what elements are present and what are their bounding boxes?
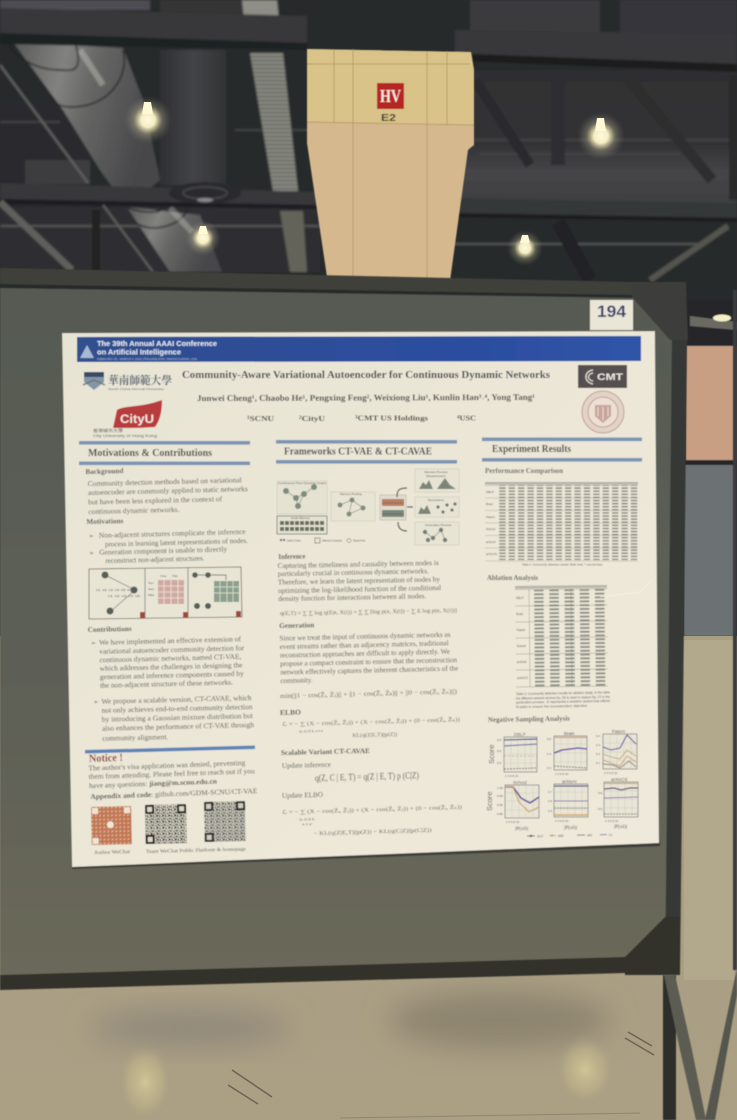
chart: arXivAI: 2 4 6 8 10	[555, 819, 569, 823]
node representation matrix	[380, 495, 406, 520]
y axis labels: Score	[485, 791, 494, 811]
table 2 caption: N-pairs to ensure the reconstruction objective.	[516, 704, 588, 709]
performance comparison heading: Performance Comparison	[485, 467, 563, 475]
chart: arXivCS: arXivCS	[611, 777, 628, 782]
chart: School: 0.95	[497, 794, 503, 798]
x axis labels: |P(ol)|	[564, 824, 577, 831]
scalable variant heading: Scalable Variant CT-CAVAE	[281, 747, 370, 757]
update ELBO formula: (e, e') ∈ E,	[299, 817, 315, 821]
ablation analysis table: arXivAI	[517, 660, 527, 664]
affiliations: ¹SCNU	[247, 414, 275, 423]
output box: attention decoder	[415, 469, 459, 492]
chart: School: School	[513, 780, 527, 785]
QR code: team WeChat platform	[145, 804, 187, 844]
notice text	[88, 759, 258, 801]
table 2 caption: Table 2: Community detection results for ablation study. In the table	[516, 690, 610, 696]
CityU logo	[93, 400, 162, 438]
ceiling lights	[124, 96, 625, 266]
steel diagonals	[0, 65, 733, 280]
chart: School: 0.90	[497, 803, 503, 807]
authors: Junwei Cheng¹, Chaobo He¹, Pengxing Feng², Weixiong Liu¹, Kunlin Han³˒⁴, Yong Tang¹	[197, 392, 535, 403]
performance comparison table: School	[486, 527, 496, 531]
background section: Community detection methods based on variational	[88, 476, 242, 488]
constraint formula: min(||1 − cos(Z̄ᵢ, Z̄ⱼ)|| + ||1 − cos(Z̄ᵢ, Z̄ₖ)|| + ||0 − cos(Z̄ᵢ, Z̄ₙ)||)	[280, 688, 457, 700]
ablation analysis table: School	[517, 644, 526, 648]
contributions section: the non-adjacent structure of these networks.	[100, 678, 233, 690]
booth number 194	[590, 300, 633, 330]
chart: arXivCS: 0.6	[598, 791, 603, 795]
diagram legend: Shared Field	[353, 538, 365, 542]
contributions section: also enhances the performance of CT-VAE through	[102, 721, 255, 733]
chart: Patent: 0.2	[596, 752, 601, 756]
ELBO formula: (e, e') ∈ E, e ≠ e'	[299, 729, 324, 734]
chart: DBLP: DBLP	[514, 732, 526, 737]
affiliations	[247, 414, 476, 423]
CMT logo: CMT	[597, 372, 624, 382]
motivations section: Non-adjacent structures complicate the inference	[99, 528, 246, 540]
update ELBO formula	[282, 804, 463, 838]
ablation analysis table: DBLP	[516, 596, 524, 600]
motivations section	[86, 514, 249, 565]
booth number 194: 194	[597, 302, 627, 321]
table 2 caption: the different variants remove Eq. (3) is used to replace Eq. (7) in the	[516, 695, 610, 700]
CityU logo: 香港城市大學	[93, 427, 123, 434]
panel: frameworks	[276, 440, 463, 838]
QR captions	[94, 847, 247, 856]
x axis labels	[515, 823, 627, 832]
hidden representation box	[331, 492, 375, 521]
chart: Brain	[547, 731, 587, 776]
chart: Brain: 0.5	[547, 737, 552, 741]
conference banner: The 39th Annual AAAI Conference	[97, 339, 217, 348]
inference text	[277, 550, 441, 603]
contributions section: by introducing a Gaussian mixture distribution but	[102, 712, 253, 724]
chart legend: ARI	[587, 833, 592, 837]
ablation analysis table: Brain	[516, 612, 524, 616]
generation text: Generation	[279, 621, 314, 630]
hidden representation box: Memory Pooling	[340, 492, 362, 496]
motivations section: process in learning latent representations of nodes.	[105, 537, 248, 549]
chart: DBLP: 0.3	[497, 761, 502, 765]
generation text	[279, 618, 459, 685]
contributions section: not only achieves end-to-end community detection	[102, 703, 253, 715]
second steel beam right	[455, 198, 737, 222]
panel: motivations and contributions	[79, 441, 258, 856]
ELBO heading: ELBO	[280, 708, 301, 717]
chart: arXivAI: 0.7	[548, 790, 553, 794]
top steel beam right	[455, 30, 737, 72]
performance comparison table: Brain	[486, 502, 493, 506]
chart: DBLP: 0.9	[497, 738, 502, 742]
performance comparison table: Patent	[486, 515, 495, 519]
inference text: Therefore, we learn the latent representation of nodes by	[278, 575, 440, 587]
chart: arXivCS: 0.5	[598, 807, 603, 811]
figure: non-adjacent structures: Title	[172, 574, 178, 578]
board top right bracket	[632, 282, 688, 340]
chart: DBLP	[497, 732, 537, 778]
chart: Patent: 0.1	[596, 761, 601, 765]
CMT logo	[578, 365, 627, 388]
conference banner: FEBRUARY 25 - MARCH 4, 2025 | PHILADELPHIA, PENNSYLVANIA, USA	[97, 358, 197, 361]
performance comparison table: arXivCS	[486, 552, 497, 556]
chart: Patent: 0.4	[596, 734, 601, 738]
generation text: reconstruction approaches are difficult to apply directly. We	[280, 648, 450, 660]
HV logo: HV	[380, 86, 401, 106]
diffuser	[169, 182, 241, 204]
SCNU logo	[83, 372, 172, 391]
divider bar above notice	[85, 746, 255, 754]
output box: reconstruction	[415, 497, 459, 517]
ceiling background	[0, 0, 737, 300]
AAAI logo	[80, 345, 94, 358]
figure: non-adjacent structures: Time	[160, 574, 167, 578]
paper crease	[600, 580, 652, 597]
y axis labels	[485, 744, 496, 811]
ablation analysis table: Patent	[516, 628, 525, 632]
output box: generation	[415, 522, 459, 545]
chart: School: 0.85	[497, 812, 503, 816]
vertical cylinder duct	[160, 50, 226, 185]
figure: non-adjacent structures: Sam	[148, 587, 155, 591]
poster	[62, 331, 660, 869]
chart: arXivCS	[598, 777, 638, 823]
chart: arXivAI: 0.5	[548, 809, 553, 813]
chart legend: NMI	[558, 834, 564, 838]
chart: Brain: 2 4 6 8 10	[555, 772, 569, 776]
heading: frameworks	[276, 440, 457, 464]
figure: non-adjacent structures	[89, 567, 242, 619]
chart: arXivAI: arXivAI	[562, 779, 577, 784]
motivations section: Motivations	[86, 517, 124, 526]
conference banner	[77, 336, 641, 362]
CityU logo: City University of Hong Kong	[93, 434, 157, 438]
generation text: network effectively captures the inherent characteristics of the	[280, 664, 458, 676]
contributions section: We have implemented an effective extension of	[99, 635, 242, 647]
top steel beam left	[0, 8, 307, 50]
background section: continuous dynamic networks.	[88, 506, 180, 516]
poster title: Community-Aware Variational Autoencoder for Continuous Dynamic Networks	[182, 369, 551, 381]
display board	[0, 268, 688, 990]
output box: reconstruction: Reconstruct	[428, 498, 444, 502]
generation text: propose a compact constraint to ensure that the reconstruction	[280, 656, 458, 668]
diagram legend	[280, 538, 365, 543]
contributions section: ➢	[91, 641, 96, 647]
ablation analysis heading: Ablation Analysis	[487, 574, 538, 582]
heading: motivations and contributions	[79, 441, 250, 465]
QR captions: Author WeChat	[94, 850, 131, 856]
chart: arXivAI	[548, 779, 588, 823]
diagram legend: Distinct Cluster	[287, 538, 301, 542]
USC seal	[582, 391, 624, 433]
node memory box	[277, 516, 327, 534]
heading: motivations and contributions: Motivations & Contributions	[88, 448, 212, 459]
generation text: Since we treat the input of continuous dynamic networks as	[279, 631, 451, 643]
chart: School: 1.00	[497, 786, 503, 790]
contributions section	[88, 622, 255, 743]
notice text: Appendix and code: github.com/GDM-SCNU/CT-VAE	[90, 787, 258, 801]
update ELBO formula: ℒ = − ∑ (X − cos(Z̄ᵢ, Z̄ⱼ)) + (X − cos(Z̄ᵢ, Z̄ⱼ)) + (0 − cos(Z̄ᵢ, Z̄ₙ))	[282, 804, 462, 816]
generation text: event streams rather than as adjacency matrices, traditional	[280, 639, 449, 651]
panel: experiment results	[482, 438, 642, 838]
figure: non-adjacent structures: Mike	[148, 593, 155, 597]
contributions section: which addresses the challenges in designing the	[100, 661, 243, 673]
generation text: community.	[280, 676, 313, 685]
output box: attention decoder: (Reparameter)	[426, 474, 446, 478]
table 2 caption	[516, 690, 611, 709]
contributions section: Contributions	[88, 625, 132, 634]
update ELBO formula: e ≠ e'	[302, 822, 313, 826]
negative sampling heading: Negative Sampling Analysis	[488, 715, 570, 724]
node memory box: Node Memory	[291, 516, 310, 520]
inference formula: q(E,T) = ∑ ∑ log q(E|e, X(t)) = ∑ ∑ [log p(e, X(t)) − ∑ E log p(e, X(t))]	[280, 607, 457, 617]
affiliations: ³CMT US Holdings	[355, 414, 428, 422]
chart: arXivAI: 0.6	[548, 799, 553, 803]
board top frame	[0, 268, 632, 297]
chart: Patent: 2 4 6 8 10	[604, 771, 618, 775]
air duct	[8, 42, 222, 272]
conference banner: on Artificial Intelligence	[97, 348, 181, 356]
floor	[0, 636, 737, 1120]
chart legend	[527, 833, 613, 838]
inference text: density function for interactions between all nodes.	[278, 592, 427, 603]
contributions section: variational autoencoder community detection for	[99, 644, 245, 656]
continuous-time dynamic graph box	[277, 481, 327, 514]
ablation analysis table	[515, 585, 608, 687]
chart: Patent	[596, 729, 637, 775]
board bottom frame	[0, 957, 625, 990]
background section: Background	[85, 467, 124, 476]
chart: DBLP: 0.6	[497, 749, 502, 753]
y axis labels: Score	[487, 744, 496, 764]
hanging sign E2	[307, 49, 474, 281]
performance comparison table: arXivAI	[486, 540, 496, 544]
heading: experiment results	[482, 438, 642, 462]
ablation analysis table: arXivCS	[517, 676, 528, 680]
QR code: author WeChat	[91, 806, 132, 845]
CityU logo: CityU	[120, 412, 154, 426]
chart: Brain: Brain	[564, 731, 575, 736]
inference text: optimizing the log-likelihood function of the conditional	[278, 584, 441, 595]
contributions section: generation and inference components caused by	[100, 670, 244, 681]
HV logo	[377, 83, 404, 109]
ELBO formula: KL(q(Z|E,T)||p(Z))	[352, 731, 398, 739]
inference text: Inference	[278, 552, 306, 561]
figure: non-adjacent structures: t1 t2 t3 t4 t5 t6 t7	[96, 588, 139, 592]
diagram legend: Difference Constraints	[322, 538, 342, 542]
motivations section: ➢	[89, 551, 94, 557]
notice heading: Notice !	[89, 752, 123, 765]
contributions section: ➢	[93, 700, 99, 706]
update inference label: Update inference	[282, 761, 331, 770]
contributions section: We propose a scalable version, CT-CAVAE, which	[101, 694, 252, 706]
update ELBO formula: − KL(q(Z|E,T)||p(Z)) − KL(q(C|Z)||p(C|Z))	[314, 827, 432, 837]
table 2 caption: generation process. -E represents a variation variant that utilizes	[516, 699, 610, 704]
chart: Patent: 0.3	[596, 743, 601, 747]
motivations section: reconstruct non-adjacent structures.	[105, 554, 205, 565]
motivations section: ➢	[89, 534, 94, 540]
ceiling vents	[242, 0, 307, 272]
QR code: homepage	[204, 801, 246, 842]
x axis labels: |P(ol)|	[515, 825, 528, 832]
background section	[85, 464, 249, 516]
SCNU logo: 華南師範大學	[108, 372, 172, 388]
output box: generation: Generation Process	[425, 523, 452, 527]
chart: School: 2 4 6 8 10	[506, 820, 520, 824]
E2 label: E2	[381, 112, 396, 124]
figure: non-adjacent structures: Tom	[148, 581, 154, 585]
notice text: have any questions: jiang@m.scnu.edu.cn	[89, 778, 217, 790]
arrows to decoders	[397, 488, 413, 531]
background section: but have been less explored in the context of	[88, 495, 223, 506]
update ELBO label: Update ELBO	[282, 791, 323, 800]
right wall panels	[680, 300, 737, 660]
board right frame	[665, 340, 687, 975]
heading: frameworks: Frameworks CT-VAE & CT-CAVAE	[284, 446, 432, 458]
motivations section: Generation component is unable to directly	[99, 545, 228, 557]
x axis labels: |P(ol)|	[614, 823, 627, 830]
chart: Brain: 0.4	[547, 752, 552, 756]
contributions section: community alignment.	[102, 733, 169, 743]
ELBO formula: ℒ = − ∑ (X − cos(Z̄ᵢ, Z̄ⱼ)) + (X − cos(Z̄ᵢ, Z̄ⱼ)) + (0 − cos(Z̄ᵢ, Z̄ₙ))	[282, 716, 460, 728]
second steel beam left	[0, 183, 318, 208]
affiliations: ²CityU	[299, 414, 326, 423]
chart: DBLP: 2 4 6 8 10	[505, 774, 519, 778]
chart: Brain: 0.3	[547, 766, 552, 770]
notice text: The author's visa application was denied, preventing	[88, 759, 246, 773]
SCNU logo: South China Normal University	[108, 387, 165, 391]
inference text: Capturing the timeliness and causality between nodes is	[278, 559, 439, 570]
continuous-time dynamic graph box: Continuous-Time Dynamic Graph	[278, 481, 326, 485]
chart legend: F1	[609, 833, 613, 837]
affiliations: ⁴USC	[457, 414, 476, 422]
table 1 caption: Table 1: Community detection results. Bold: best. *: second best.	[522, 562, 603, 566]
update inference formula: q(Z, C | E, T) = q(Z | E, T) p (C|Z)	[315, 770, 419, 784]
framework diagram	[277, 469, 459, 545]
board bottom right bracket	[625, 917, 680, 975]
QR captions: Team WeChat Public Platform & homepage	[146, 847, 247, 855]
inference text: particularly crucial in continuous dynamic networks.	[278, 567, 429, 578]
performance comparison table	[485, 482, 638, 561]
chart: arXivCS: 2 4 6 8 10	[605, 819, 619, 823]
notice text: them from attending. Please feel free to reach out if you	[89, 767, 255, 781]
contributions section: continuous dynamic networks, named CT-VAE,	[99, 653, 242, 664]
far right frame and stand legs	[663, 290, 737, 1120]
ELBO formula	[282, 716, 461, 741]
chart legend: ACC	[537, 834, 544, 838]
performance comparison table: DBLP	[486, 490, 494, 494]
heading: experiment results: Experiment Results	[492, 444, 571, 455]
output box: attention decoder: Attention Process	[424, 470, 448, 474]
chart: School	[497, 780, 539, 824]
chart: Patent: Patent	[612, 729, 626, 734]
background section: autoencoder are commonly applied to static networks	[88, 485, 248, 497]
figure: non-adjacent structures: t1 t2 t3 t4 t5	[108, 594, 141, 598]
